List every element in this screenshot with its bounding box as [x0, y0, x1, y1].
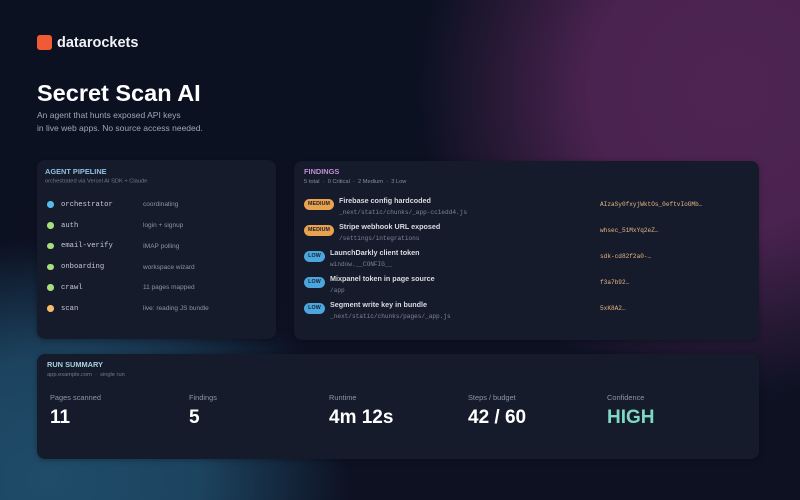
subtitle: in live web apps. No source access needed. — [37, 123, 203, 133]
stat: runtime — [329, 392, 393, 428]
finding: mixpanel: Mixpanel token in page source — [330, 274, 435, 283]
icon: logo square — [37, 35, 52, 50]
stat: steps: 42 / 60 — [468, 407, 526, 428]
finding: firebase: Firebase config hardcoded — [339, 196, 431, 205]
pipeline heading: AGENT PIPELINE — [45, 166, 107, 176]
finding: mixpanel: f3a7b92… — [600, 279, 629, 286]
stat: runtime: Runtime — [329, 392, 357, 402]
panel: agent pipeline — [37, 160, 276, 339]
stat: confidence: HIGH — [607, 407, 654, 428]
stat: findings: Findings — [189, 392, 217, 402]
panel: findings — [294, 161, 759, 340]
finding: firebase: MEDIUM — [308, 200, 330, 206]
finding: mixpanel: /app — [330, 286, 345, 294]
row: scan: scan — [61, 304, 78, 312]
finding: segment — [304, 300, 626, 320]
title: Secret Scan AI — [37, 80, 201, 106]
finding: stripe — [304, 222, 659, 242]
stat: steps — [468, 392, 526, 428]
row: email-verify: email-verify — [61, 242, 113, 250]
row: email-verify: IMAP polling — [143, 242, 179, 250]
row: email-verify — [47, 242, 179, 250]
row: orchestrator: orchestrator — [61, 200, 113, 208]
finding: firebase — [304, 196, 702, 216]
summary subheading: app.example.com · single run — [47, 372, 125, 378]
finding: stripe: Stripe webhook URL exposed — [339, 222, 440, 231]
row: onboarding: workspace wizard — [143, 264, 195, 270]
stat: pages scanned: Pages scanned — [50, 392, 101, 402]
finding: firebase: _next/static/chunks/_app-cc1edd4.js — [339, 208, 467, 216]
row: auth: login + signup — [143, 222, 183, 229]
finding: launchdarkly: LOW — [308, 252, 321, 258]
finding: stripe: whsec_51MxYq2eZ… — [600, 227, 659, 234]
finding: segment: Segment write key in bundle — [330, 300, 427, 309]
row: crawl: crawl — [61, 284, 83, 292]
stat: pages scanned: 11 — [50, 407, 70, 428]
row: crawl — [47, 284, 195, 292]
finding: firebase: AIzaSy0fxyjWktOs_0eftvIoGMb… — [600, 201, 702, 208]
stat: findings: 5 — [189, 407, 200, 428]
stat: findings — [189, 392, 217, 428]
row: crawl: 11 pages mapped — [143, 284, 195, 291]
panel: run summary — [37, 354, 759, 459]
row: orchestrator — [47, 200, 178, 208]
stat: confidence: Confidence — [607, 392, 644, 402]
finding: stripe: /settings/integrations — [339, 234, 419, 242]
finding: segment: _next/static/chunks/pages/_app.js — [330, 312, 451, 320]
finding: mixpanel — [304, 274, 629, 294]
pipeline subheading: orchestrated via Vercel AI SDK + Claude — [45, 178, 147, 184]
logo — [37, 35, 138, 51]
row: scan — [47, 304, 209, 312]
finding: mixpanel: LOW — [308, 278, 321, 284]
finding: segment: LOW — [308, 304, 321, 310]
findings heading: FINDINGS — [304, 166, 339, 176]
stat: runtime: 4m 12s — [329, 407, 393, 428]
finding: launchdarkly — [304, 248, 651, 268]
finding: launchdarkly: sdk-cd82f2a0-… — [600, 253, 651, 260]
finding: segment: 5xK8A2… — [600, 305, 626, 312]
stat: pages scanned — [50, 392, 101, 428]
summary heading: RUN SUMMARY — [47, 360, 103, 369]
subtitle — [37, 110, 203, 133]
row: auth — [47, 222, 183, 230]
subtitle: An agent that hunts exposed API keys — [37, 110, 181, 120]
findings counts: 5 total · 0 Critical · 2 Medium · 3 Low — [304, 178, 406, 184]
row: onboarding: onboarding — [61, 263, 104, 271]
row: onboarding — [47, 262, 195, 271]
brand name: datarockets — [57, 35, 138, 51]
row: orchestrator: coordinating — [143, 201, 178, 208]
finding: launchdarkly: LaunchDarkly client token — [330, 248, 419, 257]
finding: launchdarkly: window.__CONFIG__ — [330, 260, 392, 268]
stat: confidence — [607, 392, 654, 428]
finding: stripe: MEDIUM — [308, 226, 330, 232]
stat: steps: Steps / budget — [468, 392, 516, 402]
row: scan: live: reading JS bundle — [143, 305, 209, 312]
row: auth: auth — [61, 222, 78, 230]
